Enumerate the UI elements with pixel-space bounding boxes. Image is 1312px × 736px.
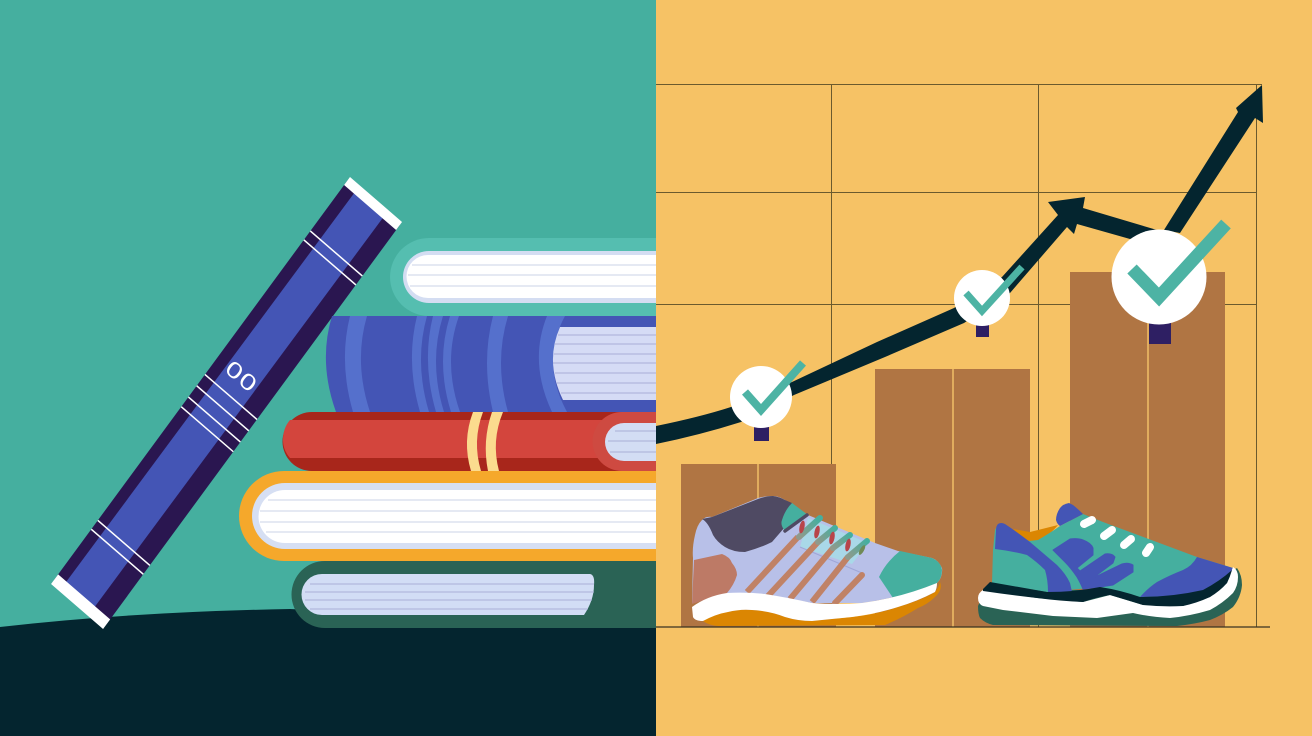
lavender shoe heel patch [692,554,737,604]
book: green book [292,561,656,628]
lavender shoe white sole [692,583,937,621]
bar 1 [681,464,836,627]
chart: bars [681,272,1225,627]
book: blue book [326,316,656,412]
icon: check badge 3 [1112,224,1226,344]
lavender shoe lace panel [800,518,868,564]
green shoe dark band [983,570,1232,606]
book: teal book on top [390,238,656,316]
arrow: rising trend line [656,85,1263,444]
green shoe side panel [1053,539,1133,589]
green shoe upper [992,514,1233,597]
icon: lavender shoe [692,496,942,626]
lavender shoe laces [799,518,867,557]
green shoe laces [1084,520,1150,553]
red book cream bands [467,412,503,471]
lavender shoe tongue [781,503,808,531]
green shoe heel [995,523,1072,592]
green shoe toe [1140,557,1233,597]
green shoe white midsole [978,567,1238,618]
panel: left teal background [0,0,656,736]
book: leaning blue book [51,177,402,629]
green shoe ankle lining [1013,525,1058,541]
lavender shoe orange outsole [703,582,941,626]
bar 3 [1070,272,1225,627]
icon: check badge 1 [730,363,803,441]
book: red book [282,412,656,471]
icon: check badge 2 [954,267,1022,337]
green shoe tongue [1056,503,1083,526]
lavender shoe toe [879,551,942,598]
panel: right yellow background [656,0,1312,736]
green shoe outsole [978,568,1242,626]
book: orange book [239,471,656,561]
icon: green running shoe [978,503,1242,626]
chart: grid lines [656,84,1262,627]
lavender shoe stripes [747,537,862,603]
lavender shoe collar [702,496,792,552]
blue book pages [553,327,656,400]
spine label: 00 [221,355,263,398]
lavender shoe upper [692,496,942,603]
red book end cover and pages [592,412,656,471]
bar 2 [875,369,1030,627]
